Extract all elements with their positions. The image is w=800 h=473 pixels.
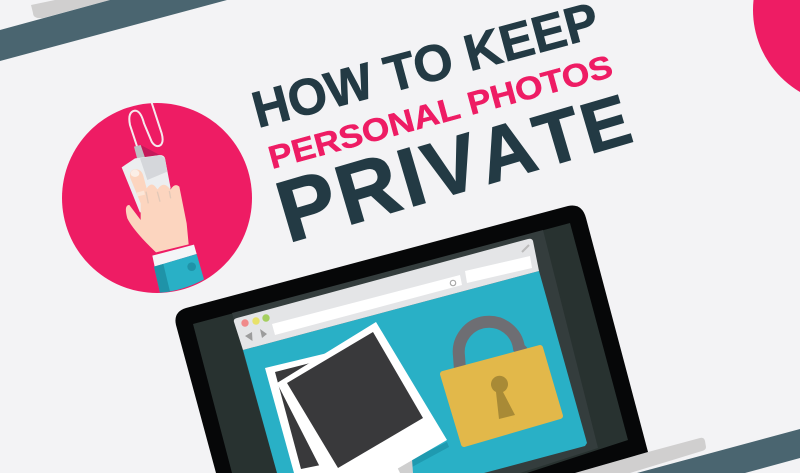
back photo frame [265,350,400,473]
padlock [443,322,560,444]
close button [241,319,249,327]
photo stand grey [323,459,413,473]
jacket sleeve [154,254,204,293]
knuckle [137,191,145,196]
front photo image [287,332,423,468]
keyhole [491,376,515,419]
back arrow [245,332,252,341]
forward arrow [260,329,267,338]
top right pink circle [753,0,800,105]
cable shadow [141,145,162,158]
browser window [234,239,587,473]
lock body [443,348,560,444]
bottom right stripe [637,429,800,473]
title line: personal photos: PERSONAL PHOTOS [264,48,616,176]
title [246,0,644,261]
address bar [272,275,462,335]
cable connector [134,145,145,159]
mouse top shade [140,155,167,180]
laptop [175,206,706,473]
hand on mouse [122,103,204,293]
finger gaps [146,191,171,203]
back photo image [275,358,395,469]
photos [265,322,449,473]
mouse and hand badge [62,103,252,293]
photo shadow [412,442,449,467]
shirt cuff [152,245,197,267]
screen [193,223,628,473]
sleeve button [187,262,196,271]
shackle [459,322,523,370]
mouse cable [129,103,163,147]
laptop bezel [175,206,648,473]
top left laptop base fragment [31,0,110,18]
front photo frame [277,322,447,473]
zoom button [262,314,270,322]
mouse body [122,155,171,213]
reload icon [450,280,456,286]
top left stripe [0,0,227,61]
screen light strip [232,230,598,473]
title line: private: PRIVATE [266,65,644,261]
minimise button [252,317,260,325]
sleeve shade [154,264,170,293]
expand icon [522,245,529,252]
fingernail [131,170,139,177]
page area [243,271,587,473]
search bar [465,256,532,283]
hand [126,169,189,252]
browser toolbar [234,239,539,350]
pink circle [62,103,252,293]
laptop base [575,438,706,473]
